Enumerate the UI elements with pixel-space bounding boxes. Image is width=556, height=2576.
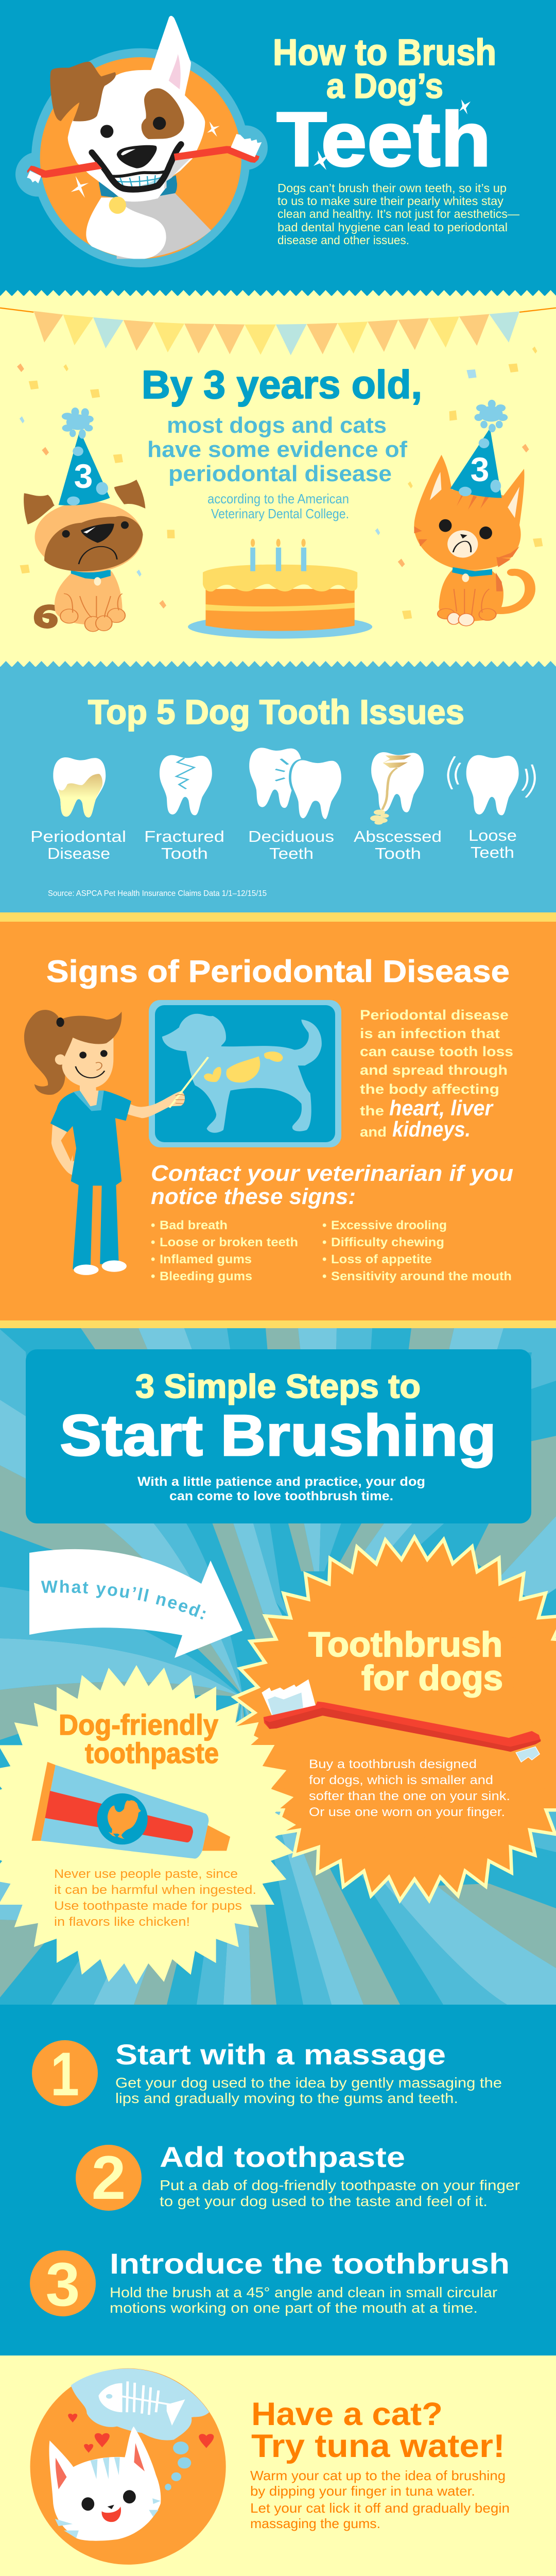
arrow: what you'll need xyxy=(29,1549,242,1658)
list: signs column 1: • xyxy=(151,1252,155,1266)
heading: dog-friendly toothpaste xyxy=(59,1708,219,1769)
icon: loose tooth xyxy=(448,755,535,815)
heading: statistic: By 3 years old, xyxy=(142,363,422,407)
panel: have a cat xyxy=(0,2355,556,2576)
heading: start brushing: Start Brushing xyxy=(60,1403,496,1468)
text block: toothbrush description: Or use one worn on your finger. xyxy=(309,1805,505,1819)
icon: periodontal disease tooth xyxy=(53,757,106,818)
heading: statistic: have some evidence of xyxy=(147,437,407,462)
text block: toothpaste description: it can be harmful when ingested. xyxy=(54,1883,256,1897)
step 3: 3 xyxy=(46,2250,80,2319)
list: signs column 1 xyxy=(151,1218,298,1283)
list: signs column 2: Sensitivity around the mouth xyxy=(331,1269,512,1283)
labels: tooth issues xyxy=(30,826,517,862)
text block: toothpaste description xyxy=(54,1867,256,1929)
list: signs column 1: • xyxy=(151,1218,155,1232)
step 3: Introduce the toothbrush xyxy=(110,2247,510,2280)
list: signs column 1: Loose or broken teeth xyxy=(160,1235,298,1249)
text block: toothbrush description xyxy=(309,1757,510,1819)
list: signs column 2: Excessive drooling xyxy=(331,1218,447,1232)
text block: periodontal explanation: can cause tooth loss xyxy=(360,1044,513,1059)
icon: birthday cake xyxy=(188,539,372,639)
text block: source of statistic: Veterinary Dental College. xyxy=(211,506,349,521)
text block: tuna water: Let your cat lick it off and gradually begin xyxy=(250,2500,510,2516)
panel: hero header xyxy=(0,0,556,296)
labels: tooth issues: Tooth xyxy=(161,844,208,862)
text block: toothpaste description: in flavors like chicken! xyxy=(54,1915,190,1929)
list: signs column 2 xyxy=(322,1218,512,1283)
step 2: to get your dog used to the taste and feel of it. xyxy=(160,2193,488,2209)
icon: red toothbrush xyxy=(262,1679,541,1762)
text block: tuna water: massaging the gums. xyxy=(250,2516,380,2531)
step 1: Get your dog used to the idea by gently massaging the xyxy=(115,2075,502,2091)
heading: contact your veterinarian: Contact your veterinarian if you xyxy=(151,1161,513,1186)
list: signs column 2: Loss of appetite xyxy=(331,1252,432,1266)
title: How to Brush a Dog's Teeth: a Dog’s xyxy=(326,66,443,106)
text block: hero intro: disease and other issues. xyxy=(277,233,409,247)
heading: contact your veterinarian xyxy=(151,1161,513,1209)
panel: birthday statistic xyxy=(0,290,556,667)
step 1: Start with a massage xyxy=(115,2038,446,2071)
text block: banner subtitle: can come to love toothbrush time. xyxy=(169,1489,393,1503)
text block: periodontal explanation: is an infection that xyxy=(360,1026,500,1041)
text block: tuna water xyxy=(250,2468,510,2531)
labels: tooth issues: Teeth xyxy=(269,844,314,862)
list: signs column 2: Difficulty chewing xyxy=(331,1235,444,1249)
heading: have a cat: Try tuna water! xyxy=(251,2428,505,2464)
panel: toothpaste burst xyxy=(0,1614,348,2009)
arrow: what you'll need: What you’ll need: xyxy=(41,1580,206,1620)
heading: statistic: most dogs and cats xyxy=(167,413,387,438)
text block: hero intro: clean and healthy. It’s not just for aesthetics— xyxy=(277,207,519,221)
icon: dog with toothbrush in mouth xyxy=(15,16,268,267)
text block: periodontal explanation: kidneys. xyxy=(392,1117,471,1141)
text block: periodontal explanation: Periodontal disease xyxy=(360,1007,509,1023)
step 3: motions working on one part of the mouth at a time. xyxy=(110,2300,478,2316)
text block: banner subtitle: With a little patience and practice, your dog xyxy=(137,1475,425,1489)
labels: tooth issues: Disease xyxy=(47,844,110,862)
icon: deciduous teeth xyxy=(249,748,342,820)
icon: fractured tooth xyxy=(160,755,212,815)
text block: toothpaste description: Use toothpaste made for pups xyxy=(54,1899,242,1913)
step 2: Add toothpaste xyxy=(160,2141,405,2173)
heading: toothbrush for dogs: for dogs xyxy=(361,1658,503,1698)
text block: banner subtitle xyxy=(137,1475,425,1503)
labels: tooth issues: Loose xyxy=(468,826,517,844)
icon: cat in party hat xyxy=(414,400,530,626)
heading: toothbrush for dogs xyxy=(308,1625,503,1698)
icon: pug in party hat xyxy=(24,408,145,632)
text block: hero intro: Dogs can’t brush their own teeth, so it’s up xyxy=(277,181,507,195)
icon: pug in party hat: 3 xyxy=(74,457,93,495)
labels: tooth issues: Fractured xyxy=(144,827,224,845)
text block: periodontal explanation: heart, liver xyxy=(389,1096,494,1120)
panel: three steps xyxy=(0,2005,556,2355)
icon: abscessed tooth xyxy=(370,752,424,825)
panel: toothbrush burst xyxy=(236,1483,556,1927)
text block: hero intro: to us to make sure their pearly whites stay xyxy=(277,194,504,208)
step 3 xyxy=(30,2247,510,2319)
step 1: 1 xyxy=(50,2040,79,2109)
list: signs column 1: • xyxy=(151,1235,155,1249)
heading: statistic xyxy=(142,363,422,486)
title: How to Brush a Dog's Teeth xyxy=(273,32,496,182)
text block: periodontal explanation: and spread through xyxy=(360,1062,508,1078)
text block: source of statistic xyxy=(207,491,349,521)
list: signs column 2: • xyxy=(322,1252,326,1266)
text block: source of statistic: according to the American xyxy=(207,491,349,506)
heading: have a cat xyxy=(251,2396,505,2464)
list: signs column 1: Bad breath xyxy=(160,1218,228,1232)
list: signs column 2: • xyxy=(322,1218,326,1232)
list: signs column 1: • xyxy=(151,1269,155,1283)
source note: Source: ASPCA Pet Health Insurance Claims Data 1/1–12/15/15 xyxy=(48,889,267,898)
labels: tooth issues: Teeth xyxy=(471,843,514,861)
text block: periodontal explanation: the body affecting xyxy=(360,1081,499,1097)
labels: tooth issues: Periodontal xyxy=(30,827,126,845)
step 2: 2 xyxy=(92,2143,126,2212)
confetti xyxy=(17,346,543,619)
step 1 xyxy=(32,2038,502,2109)
list: signs column 2: • xyxy=(322,1269,326,1283)
list: signs column 2: • xyxy=(322,1235,326,1249)
text block: hero intro xyxy=(277,181,519,247)
list: signs column 1: Bleeding gums xyxy=(160,1269,252,1283)
text block: periodontal explanation xyxy=(360,1007,513,1141)
bunting flags xyxy=(0,308,556,355)
panel: top 5 dog tooth issues xyxy=(0,661,556,912)
list: signs column 1: Inflamed gums xyxy=(160,1252,252,1266)
heading: toothbrush for dogs: Toothbrush xyxy=(308,1625,502,1664)
step 2: Put a dab of dog-friendly toothpaste on your finger xyxy=(160,2177,520,2193)
step 1: lips and gradually moving to the gums and teeth. xyxy=(115,2090,458,2106)
heading: dog-friendly toothpaste: Dog-friendly xyxy=(59,1708,218,1741)
heading: statistic: periodontal disease xyxy=(168,461,392,486)
text block: periodontal explanation: and xyxy=(360,1124,387,1140)
text block: periodontal explanation: the xyxy=(360,1103,384,1118)
heading: 3 simple steps: 3 Simple Steps to xyxy=(135,1367,421,1405)
text block: toothbrush description: softer than the one on your sink. xyxy=(309,1789,510,1803)
labels: tooth issues: Tooth xyxy=(375,844,421,862)
title: How to Brush a Dog's Teeth: How to Brush xyxy=(273,32,496,73)
labels: tooth issues: Abscessed xyxy=(354,827,442,845)
text block: tuna water: Warm your cat up to the idea of brushing xyxy=(250,2468,506,2483)
heading: signs: Signs of Periodontal Disease xyxy=(46,954,510,989)
panel: 3 simple steps banner xyxy=(26,1349,531,1523)
heading: contact your veterinarian: notice these signs: xyxy=(151,1184,356,1209)
text block: hero intro: bad dental hygiene can lead to periodontal xyxy=(277,221,508,234)
x-ray board with dog xyxy=(149,1000,341,1147)
title: How to Brush a Dog's Teeth: Teeth xyxy=(276,96,491,182)
character: veterinarian with pointer xyxy=(24,1010,208,1275)
icon: cat in party hat: 3 xyxy=(471,450,489,488)
heading: have a cat: Have a cat? xyxy=(251,2396,443,2432)
text block: toothpaste description: Never use people paste, since xyxy=(54,1867,238,1881)
text block: toothbrush description: for dogs, which is smaller and xyxy=(309,1773,493,1787)
labels: tooth issues: Deciduous xyxy=(248,827,334,845)
step 2 xyxy=(76,2141,520,2212)
icon: cat dreaming of fish xyxy=(30,2368,226,2565)
icon: toothpaste tube with chicken label xyxy=(31,1762,230,1859)
heading: top 5: Top 5 Dog Tooth Issues xyxy=(88,693,464,732)
text block: tuna water: by dipping your finger in tuna water. xyxy=(250,2483,475,2499)
icon: sparkle top of Teeth xyxy=(459,99,471,114)
panel: sunburst background xyxy=(0,1328,556,2005)
step 3: Hold the brush at a 45° angle and clean in small circular xyxy=(110,2284,497,2300)
text block: toothbrush description: Buy a toothbrush designed xyxy=(309,1757,477,1771)
panel: signs of periodontal disease xyxy=(0,922,556,1320)
icon: sparkle bottom of Teeth xyxy=(314,150,329,170)
heading: dog-friendly toothpaste: toothpaste xyxy=(85,1737,219,1769)
